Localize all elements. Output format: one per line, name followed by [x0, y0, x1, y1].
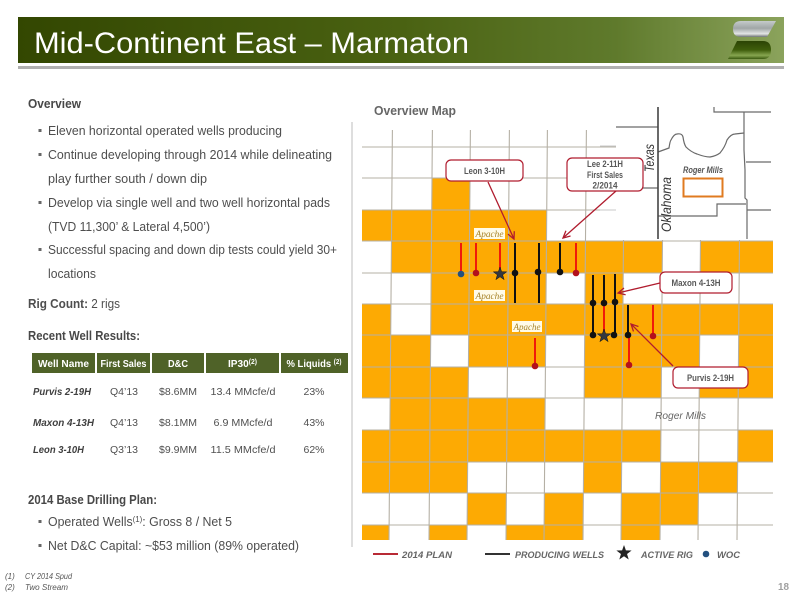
label: Texas: Texas — [642, 144, 657, 172]
Apache logos: Apache — [513, 323, 540, 333]
overview bullets: Eleven horizontal operated wells producing — [48, 124, 282, 138]
table header: (2) — [249, 359, 257, 366]
table header: First Sales — [100, 358, 147, 370]
callout: Purvis 2-19H — [631, 324, 748, 388]
page number: 18 — [778, 582, 789, 593]
table: recent well results — [32, 353, 348, 456]
overview bullets: Continue developing through 2014 while delineating — [48, 148, 332, 162]
producing wells (black) — [512, 243, 631, 338]
table header — [32, 353, 348, 373]
table header: % Liquids — [286, 358, 336, 370]
table header: Well Name — [38, 358, 89, 370]
row: Purvis 2-19H: Purvis 2-19H — [33, 386, 91, 398]
callout: Leon 3-10H: Leon 3-10H — [464, 166, 505, 176]
legend: 2014 plan: 2014 PLAN — [401, 550, 453, 561]
callout: Lee 2-11H — [563, 158, 643, 238]
title banner — [18, 17, 784, 69]
callout: Lee 2-11H: First Sales — [587, 170, 623, 180]
legend: active rig — [616, 545, 694, 561]
footnotes: Two Stream — [25, 583, 68, 592]
overview bullets: Successful spacing and down dip tests could yield 30+ — [48, 243, 337, 257]
title: Mid-Continent East – Marmaton — [34, 27, 469, 60]
active rig markers — [493, 267, 611, 342]
label: Roger Mills inset: Roger Mills — [683, 165, 723, 175]
row: Purvis 2-19H: 23% — [303, 386, 325, 398]
heading: recent well results: Recent Well Results: — [28, 329, 140, 343]
table header: D&C — [168, 358, 188, 370]
row: Purvis 2-19H: Q4’13 — [110, 386, 138, 398]
row: Maxon 4-13H: 43% — [303, 417, 325, 429]
row: Maxon 4-13H: $8.1MM — [159, 417, 197, 429]
row: Leon 3-10H: 62% — [303, 444, 325, 456]
legend: WOC: WOC — [717, 550, 740, 561]
table header: IP30 — [228, 358, 250, 370]
row: Purvis 2-19H — [33, 386, 325, 398]
callout: Maxon 4-13H: Maxon 4-13H — [672, 278, 720, 288]
drilling plan bullets: (1) — [133, 515, 143, 524]
footnotes: CY 2014 Spud — [25, 572, 72, 581]
row: Leon 3-10H: 11.5 MMcfe/d — [210, 444, 276, 456]
row: Leon 3-10H: Leon 3-10H — [33, 444, 84, 456]
row: Maxon 4-13H — [33, 417, 325, 429]
heading: drilling plan: 2014 Base Drilling Plan: — [28, 493, 157, 507]
callout: Lee 2-11H: Lee 2-11H — [587, 159, 623, 169]
inset highlight box — [684, 178, 722, 196]
callout: Purvis 2-19H: Purvis 2-19H — [687, 373, 734, 383]
drilling plan bullets — [38, 515, 299, 553]
callout: Lee 2-11H: 2/2014 — [592, 180, 618, 190]
panel: overview text — [28, 97, 337, 311]
legend — [373, 545, 740, 561]
drilling plan bullets: Net D&C Capital: ~$53 million (89% operated) — [48, 539, 299, 553]
planned wells (red) — [461, 243, 656, 369]
row: Leon 3-10H: Q3’13 — [110, 444, 138, 456]
table header: (2) — [334, 359, 342, 366]
label: Roger Mills: Roger Mills — [655, 410, 707, 422]
heading: overview: Overview — [28, 97, 81, 111]
legend: WOC — [703, 550, 740, 561]
row: Leon 3-10H: $9.9MM — [159, 444, 197, 456]
footnotes — [5, 572, 72, 592]
rig count: Rig Count: 2 rigs — [28, 297, 120, 311]
footnotes: (1) — [5, 572, 15, 581]
map: inset locator — [600, 100, 776, 240]
row: Maxon 4-13H: Q4’13 — [110, 417, 138, 429]
inset county lines — [616, 107, 771, 239]
row: Purvis 2-19H: $8.6MM — [159, 386, 197, 398]
icon: company logo — [728, 21, 776, 59]
overview bullets: Develop via single well and two well horizontal pads — [48, 196, 330, 210]
drilling plan bullets: : Gross 8 / Net 5 — [142, 515, 232, 529]
callout: Maxon 4-13H — [618, 272, 732, 293]
Apache logos — [474, 228, 542, 333]
overview bullets: (TVD 11,300’ & Lateral 4,500’) — [48, 220, 210, 234]
overview bullets: locations — [48, 267, 96, 281]
row: Maxon 4-13H: Maxon 4-13H — [33, 417, 94, 429]
overview bullets: play further south / down dip — [48, 172, 207, 186]
map: acreage grid — [362, 130, 773, 540]
panel: 2014 base drilling plan — [28, 493, 299, 553]
Apache logos: Apache — [475, 292, 504, 302]
legend: producing wells: PRODUCING WELLS — [515, 550, 605, 561]
label: Oklahoma: Oklahoma — [659, 177, 674, 232]
overview bullets — [38, 124, 337, 281]
drilling plan bullets: Operated Wells — [48, 515, 134, 529]
callout: Leon 3-10H — [446, 160, 523, 239]
WOC well marker — [458, 271, 464, 277]
footnotes: (2) — [5, 583, 15, 592]
row: Maxon 4-13H: 6.9 MMcfe/d — [214, 417, 273, 429]
legend: 2014 plan — [373, 550, 453, 561]
legend: active rig: ACTIVE RIG — [640, 550, 694, 561]
heading: overview map: Overview Map — [374, 104, 456, 118]
Apache logos: Apache — [475, 230, 504, 240]
row: Leon 3-10H — [33, 444, 325, 456]
row: Purvis 2-19H: 13.4 MMcfe/d — [210, 386, 276, 398]
